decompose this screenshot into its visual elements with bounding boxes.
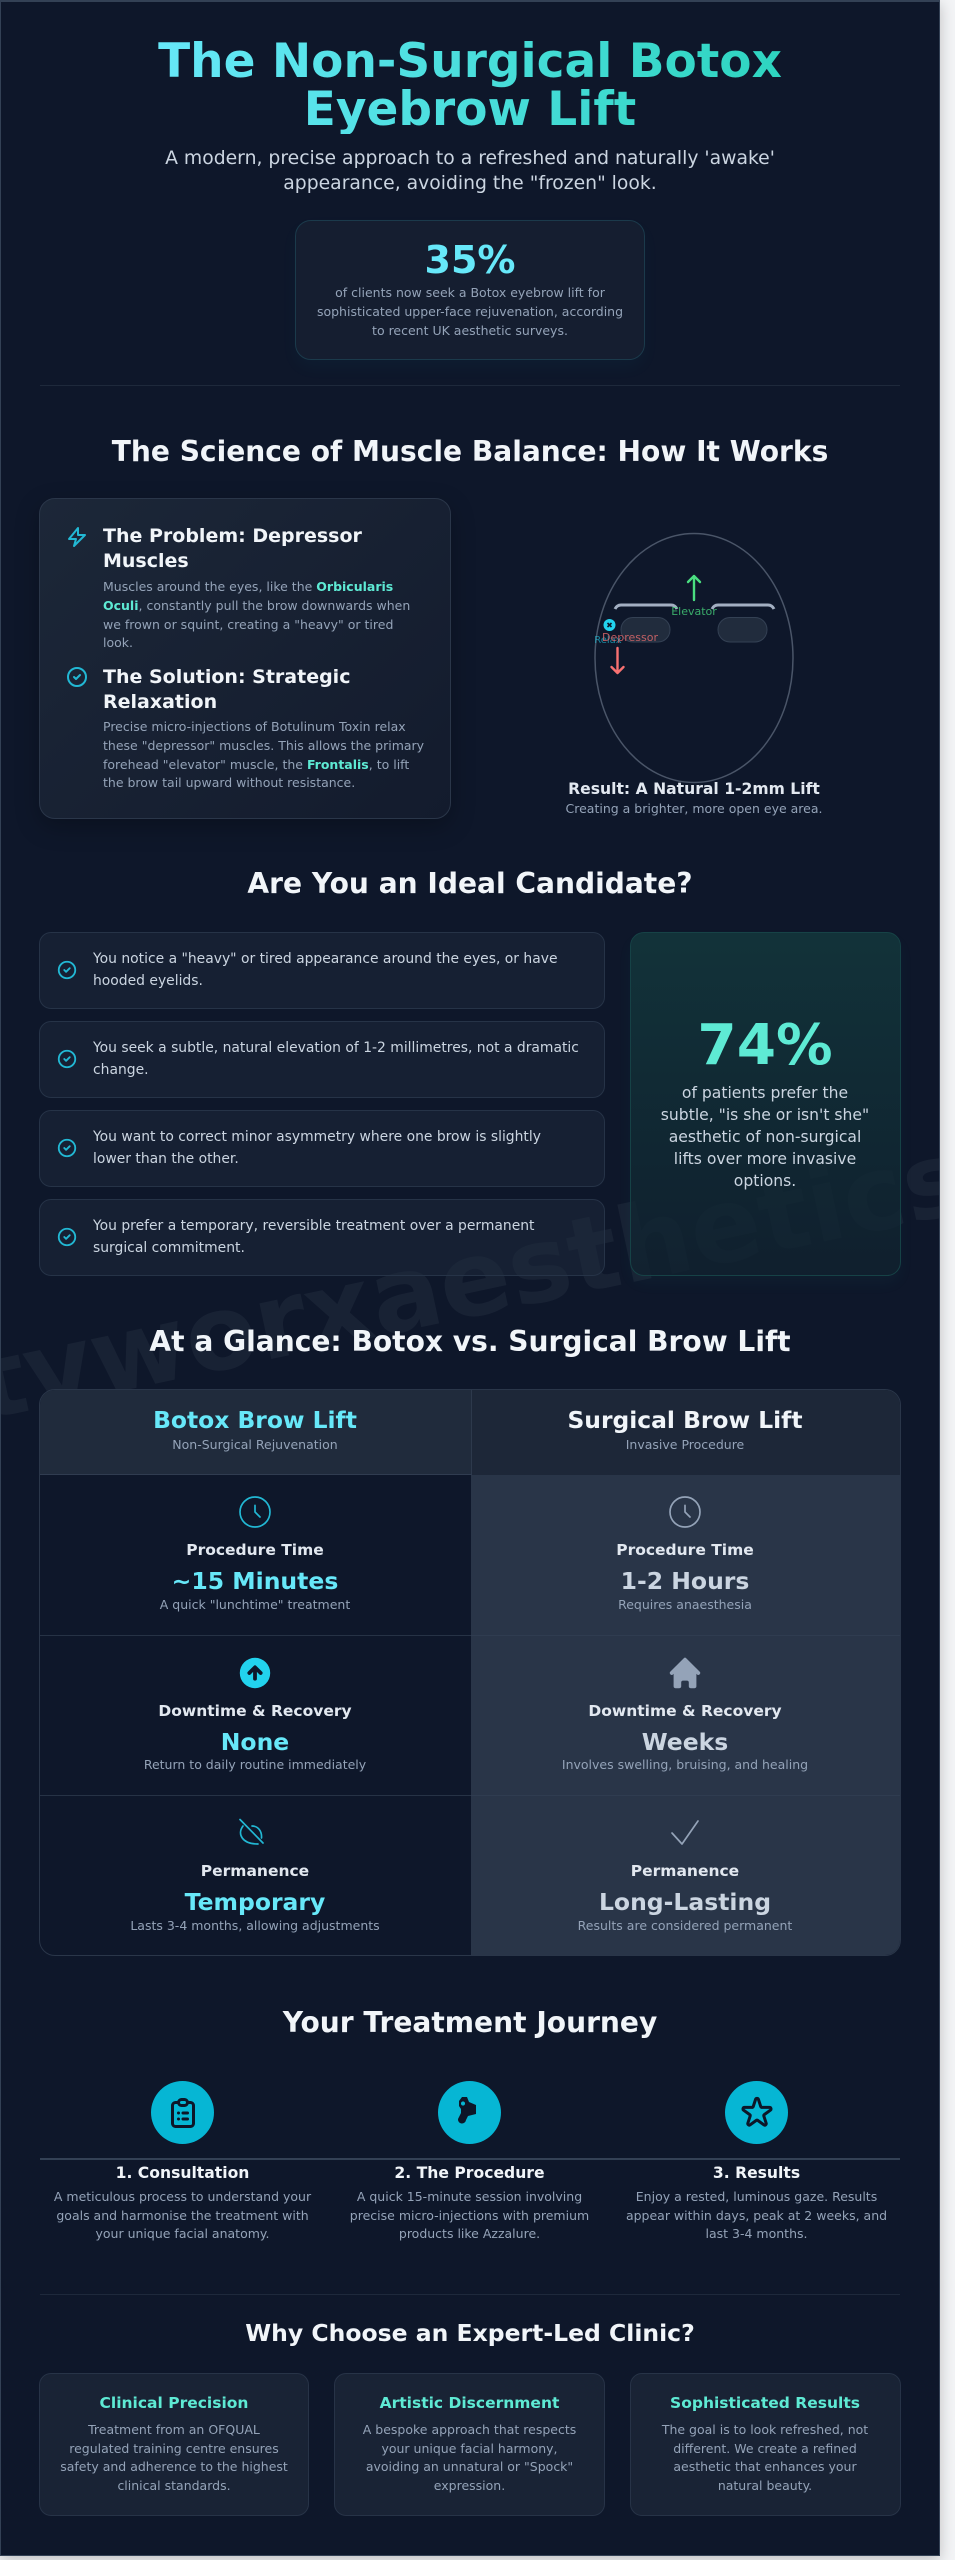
step 3 description: last 3-4 months.: [706, 2226, 807, 2241]
stat card: 74%: [630, 932, 901, 1276]
text: the problem: we frown or squint, creating a "heavy" or tired: [103, 617, 393, 632]
card: artistic discernment: [334, 2373, 605, 2516]
text: the problem: Oculi, constantly pull the brow downwards when: [103, 598, 410, 613]
subtitle: appearance, avoiding the "frozen" look.: [283, 173, 657, 194]
check icon 3: [58, 1138, 76, 1158]
diagram caption text: Creating a brighter, more open eye area.: [566, 801, 822, 816]
diagram: face with muscle arrows: [594, 532, 794, 784]
card text: artistic discernment: avoiding an unnatural or "Spock": [366, 2459, 573, 2474]
text: the solution: Precise micro-injections of Botulinum Toxin relax: [103, 719, 406, 734]
column title: botox: Botox Brow Lift: [153, 1406, 357, 1434]
diagram: face with muscle arrows: Relax: [594, 635, 622, 646]
step 1 description: your unique facial anatomy.: [96, 2226, 270, 2241]
note: swelling: Involves swelling, bruising, and healing: [562, 1757, 808, 1772]
step 2 title: 2. The Procedure: [394, 2164, 545, 2182]
step 3 description: [626, 2189, 887, 2241]
card text: clinical precision: [60, 2422, 288, 2493]
card text: clinical precision: regulated training centre ensures: [69, 2441, 279, 2456]
check icon 1: [58, 960, 76, 980]
left column header: [40, 1390, 472, 1475]
card title: sophisticated results: Sophisticated Results: [670, 2394, 860, 2412]
diagram caption title: Result: A Natural 1-2mm Lift: [568, 780, 820, 798]
step 3 description: appear within days, peak at 2 weeks, and: [626, 2208, 887, 2223]
card: clinical precision: [39, 2373, 309, 2516]
step 2 description: products like Azzalure.: [399, 2226, 540, 2241]
step 2 description: precise micro-injections with premium: [350, 2208, 589, 2223]
icon: clock cyan: [239, 1496, 271, 1528]
step 1 description: A meticulous process to understand your: [54, 2189, 311, 2204]
value: weeks: Weeks: [642, 1728, 728, 1756]
checklist item 3: [39, 1110, 605, 1187]
panel: problem and solution: [39, 498, 451, 819]
stat description: to recent UK aesthetic surveys.: [372, 323, 568, 338]
right column body: [471, 1475, 902, 1957]
card text: artistic discernment: expression.: [434, 2478, 505, 2493]
heading: why choose: Why Choose an Expert-Led Clinic?: [245, 2319, 695, 2347]
heading: the solution: The Solution: Strategic: [103, 666, 350, 688]
value: 1-2 hours: 1-2 Hours: [621, 1567, 749, 1595]
card text: clinical precision: Treatment from an OFQUAL: [88, 2422, 260, 2437]
card text: sophisticated results: aesthetic that enhances your: [673, 2459, 857, 2474]
checklist item 4: [39, 1199, 605, 1276]
value: temporary: Temporary: [185, 1888, 325, 1916]
stat description 74%: aesthetic of non-surgical: [669, 1128, 861, 1146]
title: Eyebrow Lift: [304, 82, 636, 137]
stat description 74%: options.: [734, 1172, 796, 1190]
heading: the solution: [103, 666, 350, 713]
check icon 2: [58, 1050, 76, 1068]
label: permanence surgical: Permanence: [631, 1862, 739, 1880]
text: the problem: Muscles around the eyes, like the Orbicularis: [103, 579, 393, 594]
column subtitle: botox: Non-Surgical Rejuvenation: [172, 1437, 338, 1452]
card title: artistic discernment: Artistic Discernment: [380, 2394, 559, 2412]
heading: science: The Science of Muscle Balance: How It Works: [112, 435, 828, 468]
icon: check circle: [67, 667, 87, 687]
heading: the problem: The Problem: Depressor: [103, 525, 362, 547]
checklist text 4: surgical commitment.: [93, 1240, 245, 1256]
subtitle: A modern, precise approach to a refreshed and naturally 'awake': [165, 148, 775, 169]
stat description 74%: of patients prefer the: [682, 1084, 848, 1102]
column title: surgical: Surgical Brow Lift: [567, 1406, 803, 1434]
title: [150, 38, 790, 134]
comparison table: [39, 1389, 901, 1956]
checklist text 1: [93, 951, 558, 989]
card text: artistic discernment: [362, 2422, 576, 2493]
label: procedure time surgical: Procedure Time: [616, 1541, 754, 1559]
text: the solution: [103, 719, 424, 790]
note: anaesthesia: Requires anaesthesia: [618, 1597, 752, 1612]
checklist text 3: lower than the other.: [93, 1151, 239, 1167]
diagram: face with muscle arrows: Depressor: [602, 631, 658, 644]
step 2 description: A quick 15-minute session involving: [357, 2189, 582, 2204]
card text: sophisticated results: natural beauty.: [718, 2478, 812, 2493]
checklist text 4: [93, 1218, 534, 1256]
step 3 icon: star: [725, 2081, 788, 2144]
check icon 4: [58, 1228, 76, 1246]
note: lunchtime: A quick "lunchtime" treatment: [160, 1597, 350, 1612]
value: long-lasting: Long-Lasting: [599, 1888, 771, 1916]
icon: check mark: [671, 1820, 699, 1845]
value: 15 minutes: ~15 Minutes: [172, 1567, 338, 1595]
checklist text 2: change.: [93, 1062, 149, 1078]
value: none: None: [221, 1728, 289, 1756]
heading: journey: Your Treatment Journey: [283, 2006, 657, 2039]
checklist text 1: hooded eyelids.: [93, 973, 203, 989]
text: the solution: the brow tail upward without resistance.: [103, 775, 355, 790]
checklist text 3: You want to correct minor asymmetry where one brow is slightly: [93, 1129, 541, 1145]
card text: sophisticated results: [662, 2422, 868, 2493]
stat description: of clients now seek a Botox eyebrow lift for: [335, 285, 605, 300]
step 1 icon: clipboard: [151, 2081, 214, 2144]
text: the solution: these "depressor" muscles. This allows the primary: [103, 738, 424, 753]
step 1 description: [54, 2189, 312, 2241]
text: the problem: [103, 579, 410, 650]
subtitle: [165, 148, 775, 194]
stat number 35%: 35%: [425, 238, 515, 282]
stat description 74%: subtle, "is she or isn't she": [661, 1106, 869, 1124]
card text: artistic discernment: A bespoke approach that respects: [363, 2422, 576, 2437]
title: The Non-Surgical Botox: [158, 34, 782, 89]
card text: clinical precision: safety and adherence to the highest: [60, 2459, 288, 2474]
step 3 title: 3. Results: [713, 2164, 800, 2182]
heading: the solution: Relaxation: [103, 691, 217, 713]
label: downtime surgical: Downtime & Recovery: [588, 1702, 782, 1720]
card text: sophisticated results: The goal is to look refreshed, not: [662, 2422, 868, 2437]
stat description: [317, 285, 623, 338]
step 1 title: 1. Consultation: [116, 2164, 249, 2182]
card: sophisticated results: [630, 2373, 901, 2516]
checklist text 1: You notice a "heavy" or tired appearance around the eyes, or have: [93, 951, 558, 967]
icon: clock grey: [669, 1496, 701, 1528]
step 2 description: [350, 2189, 589, 2241]
note: permanent: Results are considered permanent: [578, 1918, 792, 1933]
heading: candidate: Are You an Ideal Candidate?: [247, 867, 693, 900]
stat description 74%: lifts over more invasive: [674, 1150, 856, 1168]
heading: at a glance: At a Glance: Botox vs. Surgical Brow Lift: [149, 1325, 791, 1358]
checklist text 3: [93, 1129, 541, 1167]
label: permanence botox: Permanence: [201, 1862, 309, 1880]
heading: the problem: [103, 525, 362, 572]
step 3 description: Enjoy a rested, luminous gaze. Results: [636, 2189, 877, 2204]
note: daily routine: Return to daily routine immediately: [144, 1757, 366, 1772]
checklist text 4: You prefer a temporary, reversible treatment over a permanent: [93, 1218, 534, 1234]
checklist text 2: [93, 1040, 579, 1078]
step 1 description: goals and harmonise the treatment with: [56, 2208, 309, 2223]
text: the problem: look.: [103, 635, 133, 650]
checklist text 2: You seek a subtle, natural elevation of 1-2 millimetres, not a dramatic: [93, 1040, 579, 1056]
stat card: 35%: [295, 220, 645, 360]
right column header: [472, 1390, 902, 1475]
heading: the problem: Muscles: [103, 550, 189, 572]
note: lasts 3-4 months: Lasts 3-4 months, allowing adjustments: [130, 1918, 380, 1933]
checklist item 1: [39, 932, 605, 1009]
icon: home: [670, 1658, 700, 1688]
icon: crossed half circle: [239, 1818, 264, 1845]
step 2 icon: syringe blob: [438, 2081, 501, 2144]
card text: sophisticated results: different. We create a refined: [673, 2441, 857, 2456]
icon: arrow up circle: [240, 1658, 270, 1688]
stat number 74%: 74%: [697, 1013, 833, 1078]
card title: clinical precision: Clinical Precision: [100, 2394, 248, 2412]
text: the solution: forehead "elevator" muscle, the Frontalis, to lift: [103, 757, 409, 772]
label: procedure time botox: Procedure Time: [186, 1541, 324, 1559]
diagram: face with muscle arrows: Elevator: [671, 605, 717, 618]
stat description 74%: [661, 1084, 869, 1190]
card text: artistic discernment: your unique facial harmony,: [381, 2441, 558, 2456]
card text: clinical precision: clinical standards.: [117, 2478, 231, 2493]
column subtitle: surgical: Invasive Procedure: [626, 1437, 744, 1452]
icon: lightning bolt: [68, 527, 86, 547]
checklist item 2: [39, 1021, 605, 1098]
stat description: sophisticated upper-face rejuvenation, according: [317, 304, 623, 319]
label: downtime botox: Downtime & Recovery: [158, 1702, 352, 1720]
